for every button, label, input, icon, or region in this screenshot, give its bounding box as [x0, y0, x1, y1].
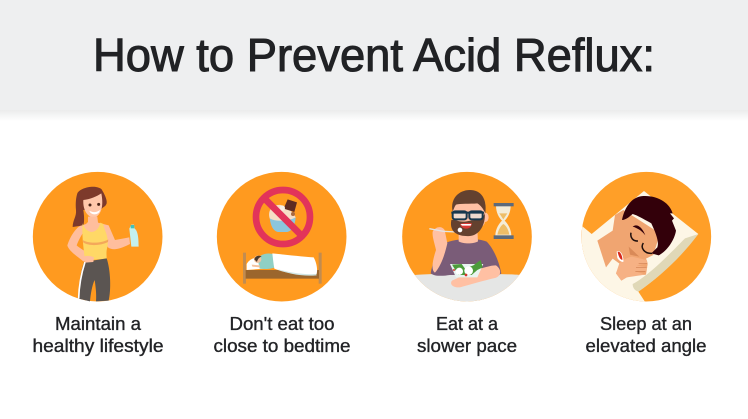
panel: don't eat too close to bedtime: [214, 172, 350, 356]
label line 2: healthy lifestyle: [32, 336, 164, 356]
label line 2: elevated angle: [586, 336, 706, 356]
label: Don't eat too: [230, 314, 334, 334]
panel: maintain a healthy lifestyle: [32, 172, 164, 356]
icon: man sleeping on raised pillow: [580, 172, 711, 303]
icon: woman with water bottle: [33, 172, 162, 301]
icon: no dessert before bed: [217, 172, 346, 301]
panel: sleep at an elevated angle: [580, 172, 711, 356]
title: How to Prevent Acid Reflux:: [93, 29, 655, 81]
panel: eat at a slower pace: [402, 172, 533, 356]
label: Eat at a: [436, 314, 499, 334]
label line 2: slower pace: [417, 336, 517, 356]
label: Maintain a: [55, 314, 142, 334]
icon: man eating salad with hourglass: [402, 172, 533, 303]
label: Sleep at an: [600, 314, 692, 334]
header banner: [0, 0, 748, 121]
label line 2: close to bedtime: [214, 336, 350, 356]
